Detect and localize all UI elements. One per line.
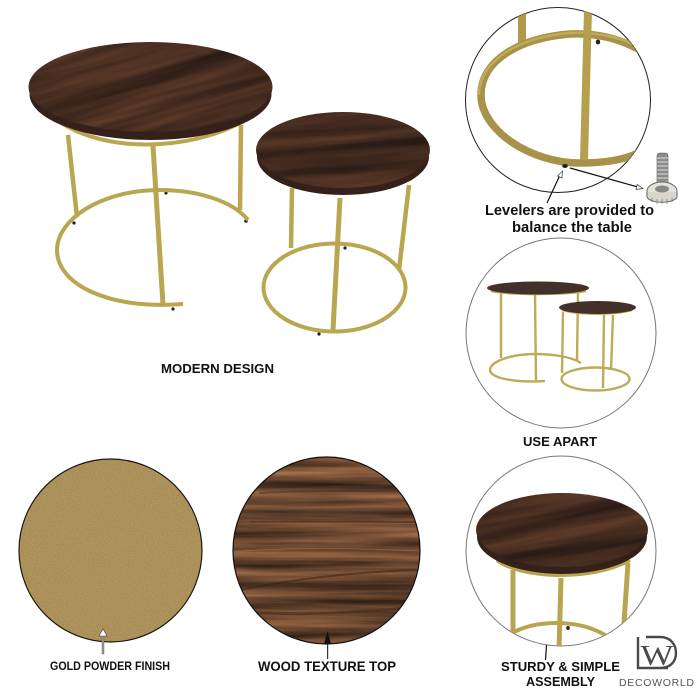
logo: decoworld: DECOWORLD (619, 677, 694, 689)
small table (256, 112, 430, 336)
arrow: wood texture (324, 631, 331, 659)
caption: sturdy assembly: ASSEMBLY (526, 674, 595, 689)
callout line: assembly (546, 645, 547, 660)
large table (28, 42, 272, 311)
panel: levelers detail (466, 8, 650, 192)
caption: sturdy assembly: STURDY & SIMPLE (501, 659, 620, 674)
panel: sturdy assembly (466, 456, 656, 646)
caption: wood texture: WOOD TEXTURE TOP (258, 658, 396, 674)
caption: levelers: Levelers are provided to (485, 203, 654, 219)
caption: sturdy assembly (501, 659, 620, 689)
caption: levelers: balance the table (512, 220, 632, 236)
panel: use apart (466, 238, 656, 428)
arrow: to leveler screw (570, 168, 643, 190)
logo: decoworld: W (640, 640, 674, 672)
icon: leveler screw (647, 153, 677, 204)
caption: gold powder: GOLD POWDER FINISH (50, 659, 170, 673)
arrow: to leveler foot (547, 171, 562, 203)
caption: use apart: USE APART (523, 434, 597, 449)
logo: decoworld (619, 637, 694, 689)
caption: levelers (485, 203, 654, 236)
swatch: wood texture (230, 455, 425, 647)
arrow: gold powder (99, 629, 107, 654)
swatch: gold powder (15, 455, 207, 647)
caption: modern design: MODERN DESIGN (161, 361, 274, 376)
